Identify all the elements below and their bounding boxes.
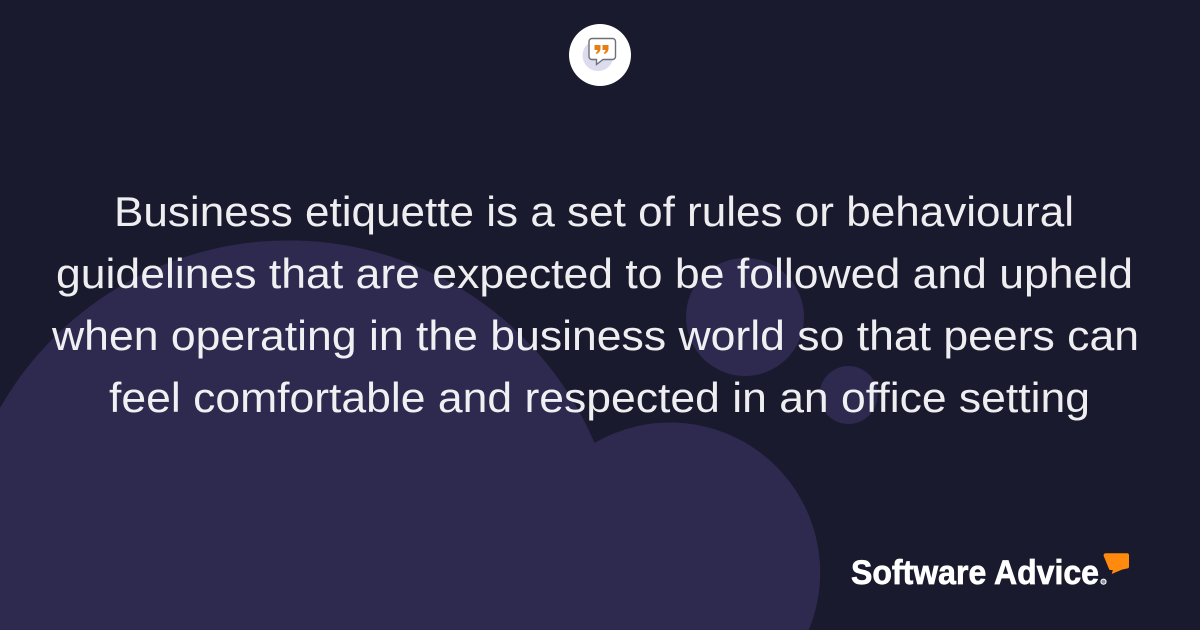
quote text: feel comfortable and respected in an office setting: [109, 374, 1090, 421]
logo: Software Advice: Software Advice: [851, 554, 1099, 592]
quote text: Business etiquette is a set of rules or behavioural: [114, 188, 1074, 235]
quote text: [51, 188, 1139, 421]
quote text: guidelines that are expected to be followed and upheld: [56, 250, 1133, 297]
icon: quote speech bubble badge: [569, 24, 631, 86]
quote text: when operating in the business world so that peers can: [51, 312, 1139, 359]
background cloud shapes: [0, 240, 878, 630]
